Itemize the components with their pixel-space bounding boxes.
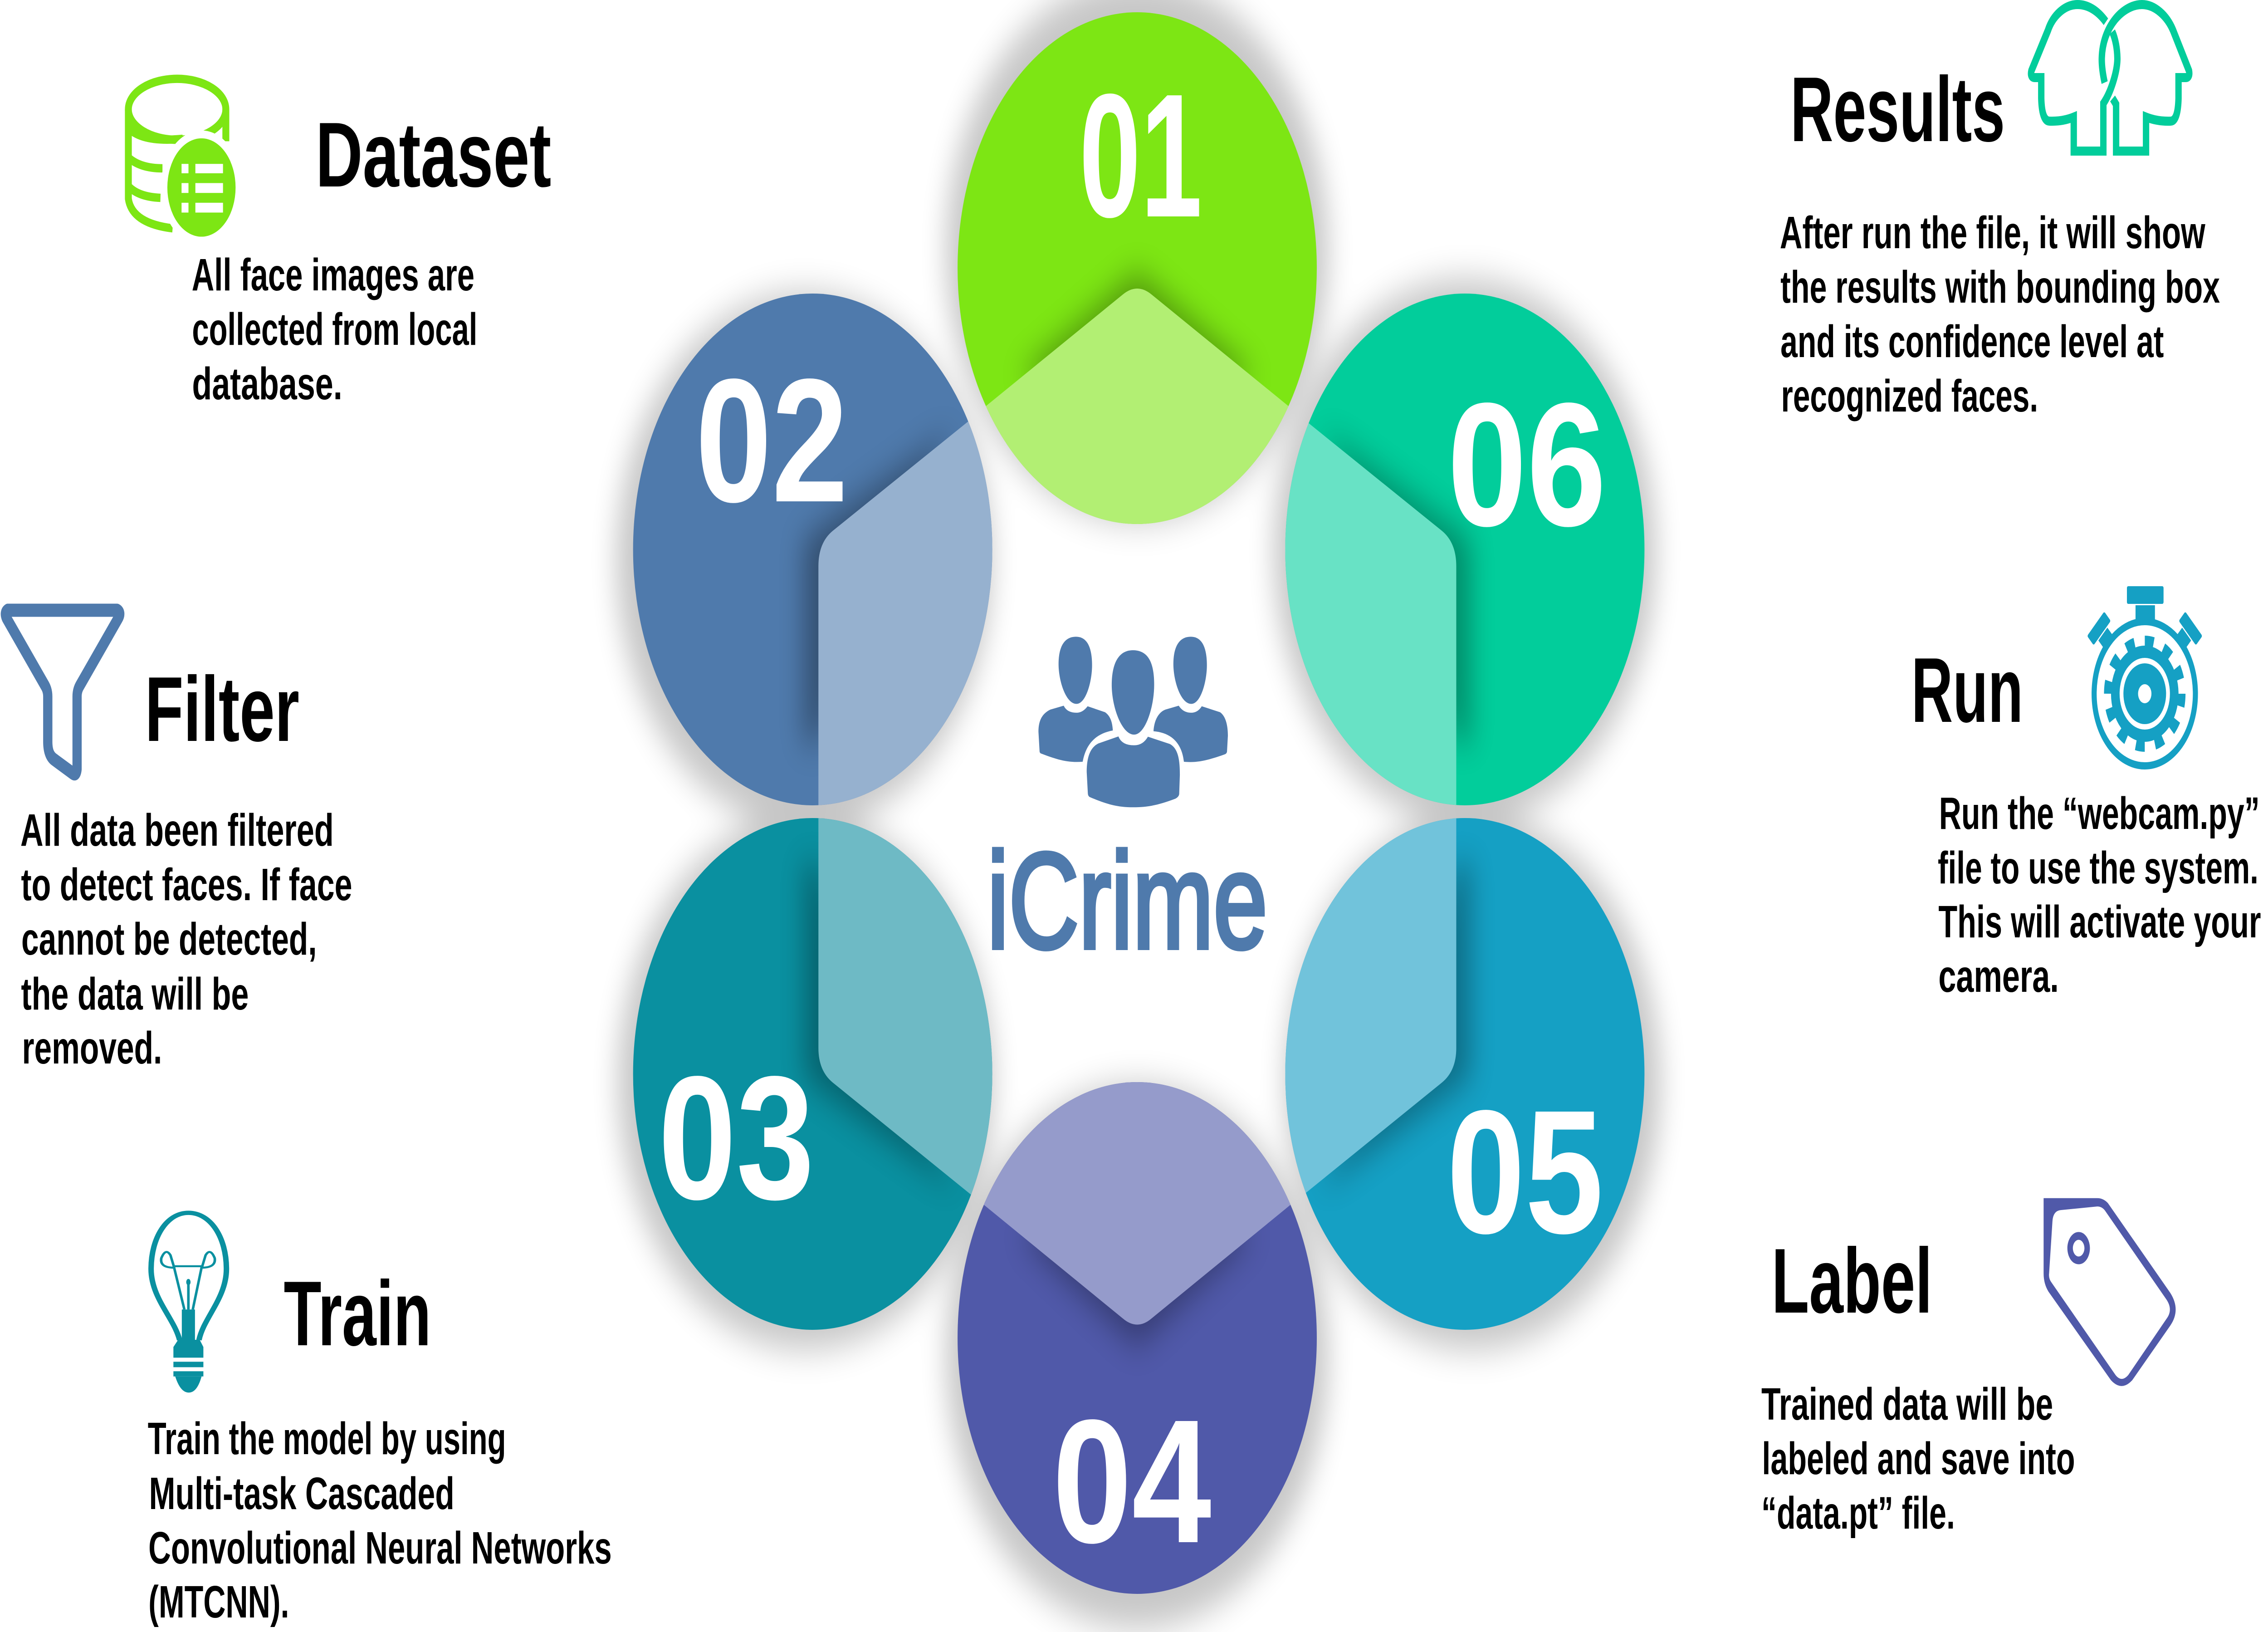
number 05: 05 bbox=[1447, 1074, 1603, 1270]
heading: Run bbox=[1911, 639, 2023, 742]
icon: light bulb bbox=[151, 1213, 226, 1392]
circle 04 bbox=[955, 1066, 1319, 1594]
description: labeled and save into bbox=[1762, 1434, 2075, 1484]
description: the results with bounding box bbox=[1780, 262, 2220, 313]
description: camera. bbox=[1938, 951, 2059, 1002]
description: Multi-task Cascaded bbox=[149, 1469, 455, 1519]
description: “data.pt” file. bbox=[1761, 1488, 1955, 1539]
panel: run bbox=[1911, 586, 2261, 1002]
icon: three people bbox=[1038, 637, 1228, 807]
description: file to use the system. bbox=[1938, 843, 2258, 893]
description: (MTCNN). bbox=[148, 1577, 289, 1627]
heading: Label bbox=[1772, 1230, 1932, 1333]
circle 02 bbox=[633, 294, 1019, 817]
description: and its confidence level at bbox=[1780, 317, 2164, 367]
description: After run the file, it will show bbox=[1780, 208, 2205, 258]
drop shadows of the circles bbox=[616, 0, 1661, 1629]
icon: tag bbox=[2043, 1198, 2175, 1386]
description bbox=[20, 805, 352, 1073]
description bbox=[1780, 208, 2220, 421]
description: All face images are bbox=[192, 250, 474, 300]
panel: label bbox=[1761, 1198, 2175, 1539]
number 04: 04 bbox=[1052, 1383, 1212, 1580]
description bbox=[148, 1414, 612, 1627]
heading: Train bbox=[284, 1262, 431, 1365]
description: Convolutional Neural Networks bbox=[148, 1523, 612, 1573]
description: recognized faces. bbox=[1781, 371, 2038, 421]
description: cannot be detected, bbox=[21, 914, 317, 965]
circle 03 bbox=[633, 808, 1019, 1330]
description: All data been filtered bbox=[20, 805, 334, 856]
heading: Dataset bbox=[316, 103, 551, 206]
description: the data will be bbox=[21, 969, 249, 1019]
heading: Filter bbox=[145, 658, 299, 761]
description bbox=[1761, 1379, 2075, 1539]
description bbox=[1938, 789, 2261, 1002]
number 01: 01 bbox=[1079, 58, 1202, 254]
description: Train the model by using bbox=[148, 1414, 506, 1464]
central title: iCrime bbox=[987, 824, 1267, 977]
number 03: 03 bbox=[658, 1040, 814, 1236]
number 06: 06 bbox=[1447, 367, 1606, 563]
icon: stopwatch gear bbox=[2087, 586, 2202, 766]
description: Trained data will be bbox=[1761, 1379, 2053, 1430]
icon: two heads bbox=[2031, 5, 2189, 151]
description: This will activate your bbox=[1938, 897, 2261, 947]
number 02: 02 bbox=[695, 343, 848, 539]
panel: filter bbox=[5, 610, 352, 1073]
icon: database bbox=[128, 79, 242, 245]
description: removed. bbox=[22, 1023, 162, 1073]
description: to detect faces. If face bbox=[21, 860, 352, 910]
description bbox=[192, 250, 477, 409]
heading: Results bbox=[1790, 58, 2005, 161]
description: database. bbox=[192, 359, 342, 409]
panel: train bbox=[148, 1213, 612, 1627]
icon: funnel bbox=[5, 610, 120, 774]
panel: results bbox=[1780, 5, 2220, 421]
circle 06 bbox=[1258, 294, 1644, 817]
circle 01 bbox=[955, 12, 1319, 544]
circle 05 bbox=[1258, 808, 1644, 1330]
description: collected from local bbox=[192, 304, 477, 355]
description: Run the “webcam.py” bbox=[1939, 789, 2260, 839]
panel: dataset bbox=[128, 79, 551, 409]
